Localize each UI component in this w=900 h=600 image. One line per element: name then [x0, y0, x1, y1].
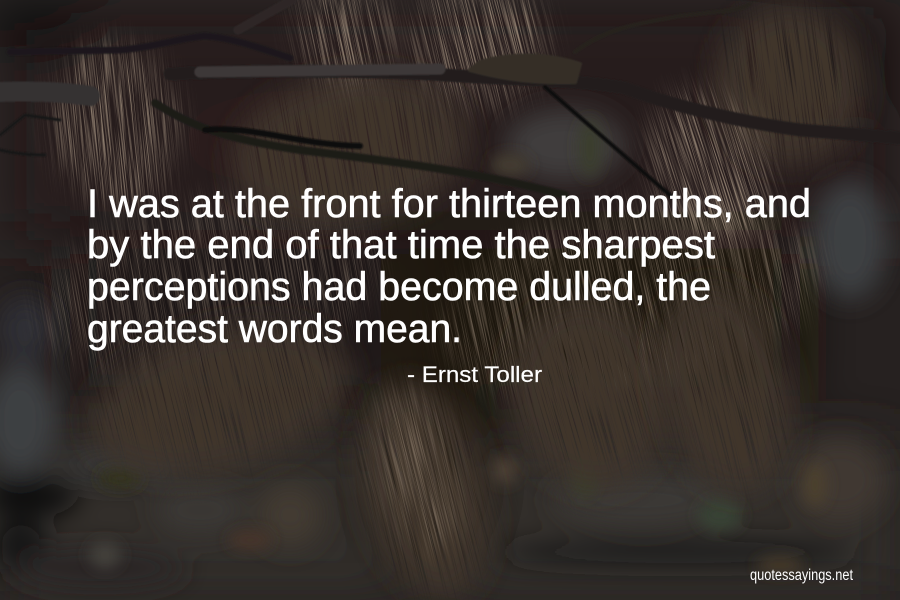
quote text: I was at the front for thirteen months, and [87, 182, 811, 226]
quote text: greatest words mean. [87, 307, 462, 351]
branches [0, 0, 900, 197]
watermark: site name: quotessayings.net [750, 567, 854, 584]
author attribution: - Ernst Toller [407, 362, 542, 387]
quote text: perceptions had become dulled, the [87, 265, 711, 309]
quote text: by the end of that time the sharpest [87, 223, 715, 267]
